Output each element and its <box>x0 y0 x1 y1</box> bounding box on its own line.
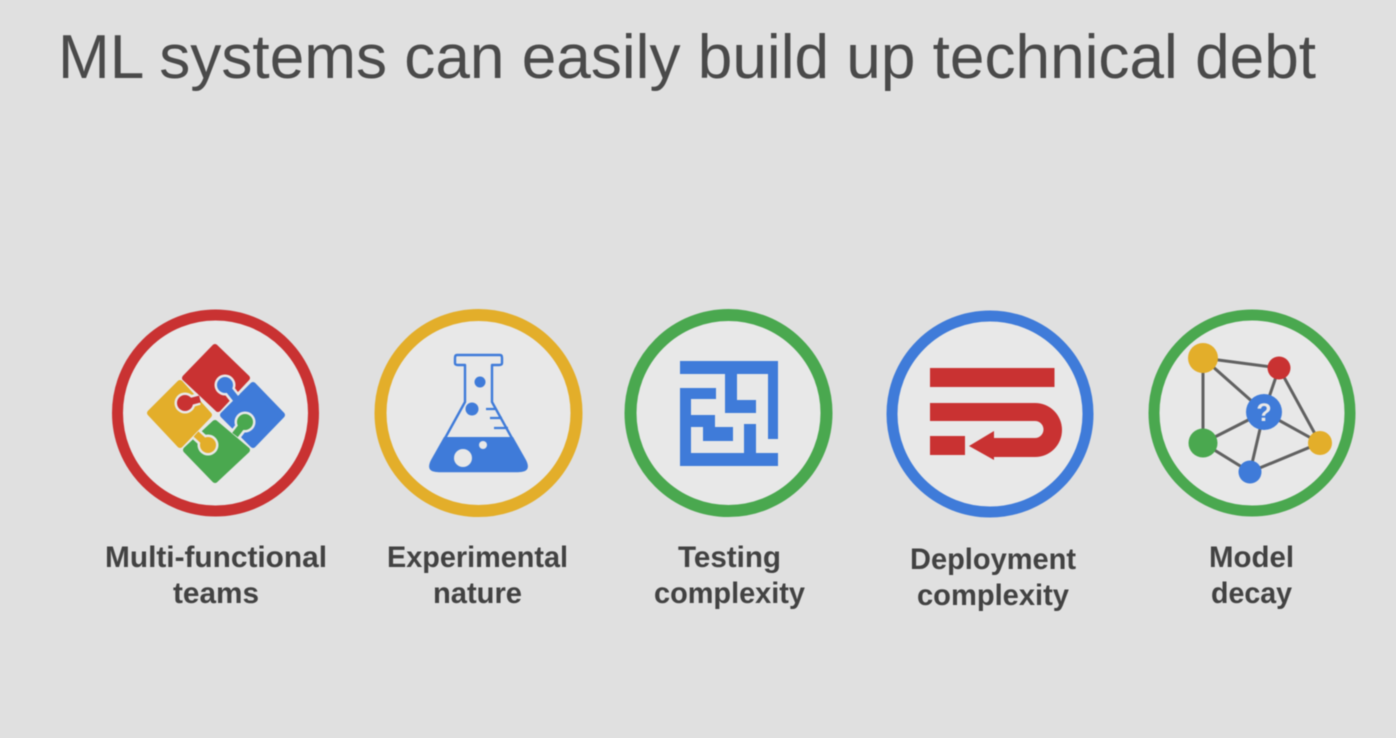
icon: flask <box>429 355 528 472</box>
label: experimental nature <box>387 541 568 610</box>
icon ring: green <box>630 315 826 511</box>
label: experimental nature: nature <box>433 577 522 610</box>
label: deployment complexity: Deployment <box>910 543 1076 576</box>
label: model decay <box>1209 541 1294 610</box>
icon: puzzle <box>150 347 282 480</box>
icon ring: blue <box>892 316 1088 512</box>
label: multi-functional teams: Multi-functional <box>105 541 327 574</box>
title: ML systems can easily build up technical debt <box>58 23 1316 92</box>
label: testing complexity <box>654 541 805 610</box>
label: multi-functional teams: teams <box>173 577 259 610</box>
label: experimental nature: Experimental <box>387 541 568 574</box>
label: multi-functional teams <box>105 541 327 610</box>
label: deployment complexity <box>910 543 1076 612</box>
panel: model decay <box>1154 315 1350 610</box>
icon ring: green <box>1154 315 1350 511</box>
panel: multi-functional teams <box>105 315 327 610</box>
panel: testing complexity <box>630 315 826 610</box>
icon ring: red <box>118 315 314 511</box>
label: model decay: decay <box>1211 577 1292 610</box>
icon ring: yellow <box>380 315 576 511</box>
icon: deployment return arrow <box>930 368 1062 460</box>
label: testing complexity: complexity <box>654 577 805 610</box>
panel: experimental nature <box>380 315 576 610</box>
panel: deployment complexity <box>892 316 1088 612</box>
label: testing complexity: Testing <box>678 541 781 574</box>
icon: network: ? <box>1256 399 1272 427</box>
icon: network <box>1188 343 1332 484</box>
label: model decay: Model <box>1209 541 1294 574</box>
label: deployment complexity: complexity <box>917 579 1069 612</box>
icon: maze <box>680 361 778 466</box>
